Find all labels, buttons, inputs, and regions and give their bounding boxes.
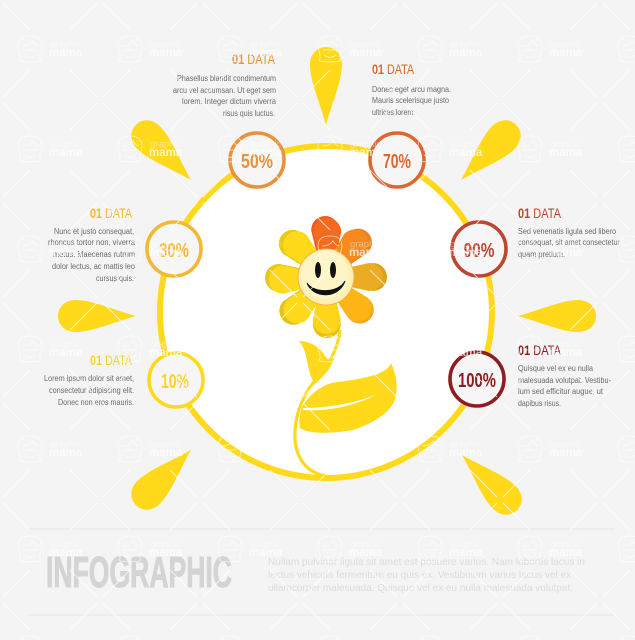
text block: 70% bbox=[372, 61, 451, 117]
text block: 30%: cursus quis. bbox=[96, 274, 134, 283]
text block: 10%: Lorem ipsum dolor sit amet, bbox=[44, 374, 134, 383]
text block: 100%: 01 DATA bbox=[518, 342, 562, 358]
text block: 30%: rhoncus tortor non, viverra bbox=[48, 238, 136, 247]
text block: 30%: dolor lectus, ac mattis leo bbox=[52, 262, 136, 271]
big circle bbox=[160, 146, 492, 478]
text block: 70%: 01 DATA bbox=[372, 61, 415, 77]
text block: 100%: dapibus risus. bbox=[518, 399, 561, 408]
text block: 30%: Nunc et justo consequat, bbox=[54, 227, 134, 236]
ring: 100%: 100% bbox=[458, 370, 496, 392]
text block: 50% bbox=[173, 51, 277, 118]
text block: 70%: Donec eget arcu magna. bbox=[372, 85, 451, 94]
flower stem and leaves bbox=[295, 330, 397, 476]
ring: 10% bbox=[149, 353, 203, 407]
ring: 90% bbox=[452, 222, 506, 276]
footer text bbox=[268, 556, 585, 594]
text block: 30% bbox=[48, 205, 136, 283]
sun rays bbox=[58, 47, 596, 521]
text block: 50%: 01 DATA bbox=[232, 51, 276, 67]
footer text: ullamcorper malesuada. Quisque vel ex eu nulla malesuada volutpat. bbox=[268, 582, 573, 594]
text block: 10%: Donec non eros mauris. bbox=[58, 398, 134, 407]
text block: 70%: ultrices lorem. bbox=[372, 108, 415, 117]
ring: 90%: 90% bbox=[464, 240, 495, 262]
footer text: Nullam pulvinar ligula sit amet est posuere varius. Nam lobortis lacus in bbox=[268, 556, 585, 568]
text block: 50%: risus quis luctus. bbox=[223, 109, 275, 118]
ring: 50%: 50% bbox=[241, 151, 273, 173]
text block: 30%: 01 DATA bbox=[90, 205, 133, 221]
ring: 50% bbox=[230, 133, 284, 187]
ring: 70% bbox=[370, 133, 424, 187]
ring: 30%: 30% bbox=[159, 240, 189, 262]
ring: 10%: 10% bbox=[161, 371, 189, 393]
text block: 90%: Sed venenatis ligula sed libero bbox=[518, 227, 617, 236]
text block: 100%: lum sed efficitur augue, ut bbox=[518, 387, 604, 396]
text block: 50%: arcu vel accumsan. Ut eget sem bbox=[173, 86, 276, 95]
flower petals bbox=[265, 216, 387, 338]
text block: 30%: metus. Maecenas rutrum bbox=[53, 250, 135, 259]
text block: 100%: Quisque vel ex eu nulla bbox=[518, 364, 594, 373]
text block: 100% bbox=[518, 342, 611, 408]
text block: 90%: 01 DATA bbox=[518, 205, 562, 221]
text block: 90%: quam pretium. bbox=[518, 250, 565, 259]
text block: 10%: consectetur adipiscing elit. bbox=[49, 386, 134, 395]
ring: 100% bbox=[450, 352, 504, 406]
ring: 30% bbox=[147, 222, 201, 276]
ring: 70%: 70% bbox=[383, 151, 411, 173]
text block: 50%: Phasellus blandit condimentum bbox=[177, 74, 276, 83]
text block: 70%: Mauris scelerisque justo bbox=[372, 96, 450, 105]
text block: 90% bbox=[518, 205, 620, 259]
title: INFOGRAPHIC bbox=[46, 548, 232, 597]
text block: 50%: lorem. Integer dictum viverra bbox=[182, 97, 277, 106]
text block: 100%: malesuada volutpat. Vestibu- bbox=[518, 376, 611, 385]
text block: 90%: consequat, sit amet consectetur bbox=[518, 238, 620, 247]
text block: 10%: 01 DATA bbox=[90, 352, 133, 368]
text block: 10% bbox=[44, 352, 134, 407]
footer text: lectus vehicula fermentum eu quis ex. Vestibulum varius lacus vel ex bbox=[268, 569, 572, 581]
smiley face bbox=[298, 248, 354, 306]
